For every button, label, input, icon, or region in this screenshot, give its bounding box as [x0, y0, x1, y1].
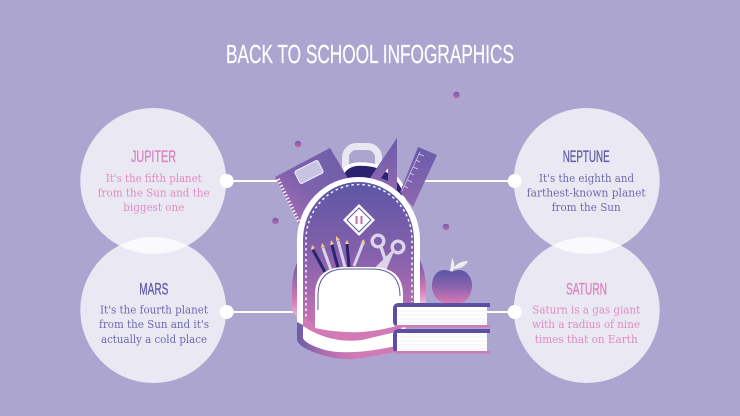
icon: pencils	[313, 241, 363, 272]
text: neptune description	[527, 172, 646, 214]
text: jupiter description	[98, 172, 210, 214]
text: mars description: from the Sun and it's	[99, 318, 209, 331]
text: saturn description	[532, 304, 641, 346]
text: neptune description: It's the eighth and	[539, 172, 634, 185]
icon: side pockets	[292, 257, 426, 318]
icon: front pocket	[315, 267, 403, 332]
icon: diamond badge	[343, 204, 375, 236]
icon: top book	[393, 303, 490, 328]
icon: scissors	[372, 235, 404, 268]
icon: bottom flap	[297, 322, 396, 359]
panel: neptune	[514, 108, 660, 254]
text: neptune description: farthest-known planet	[527, 186, 646, 200]
text: saturn description: Saturn is a gas giant	[532, 304, 641, 316]
heading: jupiter: JUPITER	[131, 147, 176, 166]
connector: mars	[220, 305, 300, 319]
icon: white bottom panel	[303, 325, 396, 352]
text: mars description: It's the fourth planet	[100, 304, 209, 316]
icon: backpack body	[303, 182, 414, 340]
icon: ruler	[400, 147, 437, 207]
text: mars description: actually a cold place	[101, 333, 207, 346]
text: jupiter description: biggest one	[123, 201, 184, 214]
panel: mars	[80, 237, 226, 383]
icon: pink band under pocket	[303, 318, 396, 341]
icon: apple	[432, 258, 472, 303]
decorative dots	[272, 92, 460, 230]
icon: back dome	[340, 164, 404, 200]
icon: set square	[370, 138, 397, 190]
text: jupiter description: from the Sun and the	[98, 186, 210, 200]
icon: handle	[346, 146, 378, 178]
icon: backpack illustration	[275, 138, 490, 359]
connector: saturn	[480, 305, 522, 319]
connector: jupiter	[220, 174, 300, 188]
heading: mars: MARS	[139, 279, 168, 298]
text: mars description	[99, 304, 209, 346]
icon: pencil tips	[311, 236, 365, 250]
icon: backpack body rim	[297, 177, 420, 345]
icon: stitching	[306, 184, 412, 322]
icon: pocket zip	[318, 269, 400, 310]
panel: jupiter	[80, 108, 226, 254]
connector: neptune	[420, 174, 522, 188]
panel: saturn	[514, 237, 660, 383]
text: jupiter description: It's the fifth planet	[106, 172, 202, 185]
text: neptune description: from the Sun	[552, 201, 621, 214]
heading: neptune: NEPTUNE	[563, 147, 610, 166]
text: saturn description: times that on Earth	[535, 333, 638, 346]
icon: bottom book	[393, 329, 490, 354]
title: BACK TO SCHOOL INFOGRAPHICS	[226, 39, 514, 69]
icon: notebook	[275, 148, 355, 226]
text: saturn description: with a radius of nine	[532, 318, 640, 331]
heading: saturn: SATURN	[566, 279, 607, 298]
